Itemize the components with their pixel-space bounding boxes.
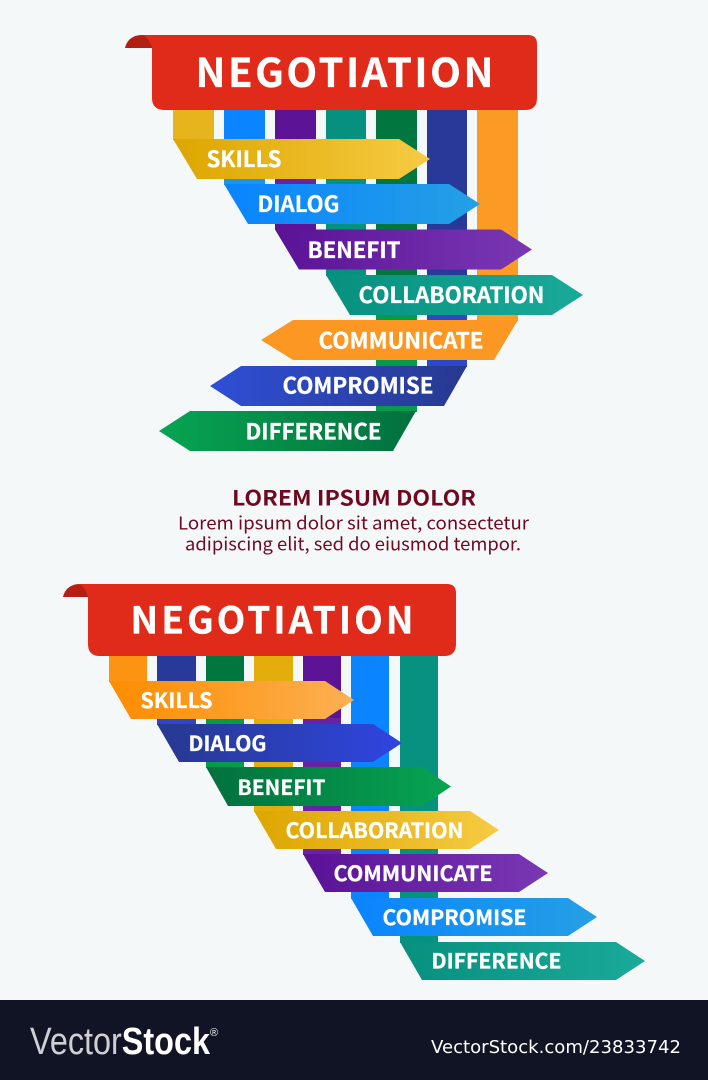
arrow: skills (173, 139, 430, 179)
footer image id: VectorStock.com/23833742 (431, 1037, 681, 1058)
footer logo: VectorStock (30, 1021, 211, 1063)
arrow: dialog: DIALOG (188, 728, 266, 758)
body line 2: adipiscing elit, sed do eiusmod tempor. (185, 530, 521, 556)
arrow: difference (400, 942, 645, 980)
arrow: communicate: COMMUNICATE (318, 324, 484, 356)
arrow: benefit (275, 230, 532, 270)
arrow: compromise: COMPROMISE (382, 902, 526, 932)
panel: top negotiation diagram (125, 35, 583, 451)
footer bar (0, 1000, 708, 1080)
arrow: compromise: COMPROMISE (282, 368, 434, 400)
arrow: difference: DIFFERENCE (246, 414, 382, 446)
arrow: collaboration: COLLABORATION (286, 815, 464, 845)
registered mark: ® (210, 1027, 218, 1039)
subheading: LOREM IPSUM DOLOR (232, 482, 476, 512)
bottom banner (63, 584, 456, 656)
arrow: compromise (351, 898, 597, 936)
bottom banner: NEGOTIATION (130, 590, 414, 644)
arrow: communicate (303, 854, 548, 892)
arrow: collaboration: COLLABORATION (358, 278, 544, 310)
arrow: compromise (210, 366, 467, 406)
arrow: skills: SKILLS (140, 685, 212, 715)
arrow: dialog: DIALOG (258, 187, 340, 219)
top banner: NEGOTIATION (196, 41, 494, 99)
arrow: benefit (206, 767, 451, 806)
top banner (125, 35, 537, 110)
arrow: collaboration (326, 275, 583, 315)
arrow: benefit: BENEFIT (238, 772, 326, 802)
arrow: dialog (224, 184, 480, 224)
arrow: difference: DIFFERENCE (432, 946, 562, 976)
arrow: dialog (157, 724, 402, 762)
arrow: communicate (261, 320, 518, 360)
top ribbon columns (173, 110, 518, 412)
arrow: benefit: BENEFIT (308, 233, 401, 265)
panel: bottom negotiation diagram (63, 584, 645, 980)
arrow: communicate: COMMUNICATE (334, 858, 492, 888)
arrow: skills (109, 681, 354, 719)
arrow: skills: SKILLS (206, 142, 282, 174)
text block: lorem ipsum (178, 482, 530, 556)
arrow: collaboration (254, 811, 499, 849)
body line 1: Lorem ipsum dolor sit amet, consectetur (178, 510, 530, 536)
arrow: difference (159, 411, 416, 451)
bottom ribbon columns (109, 656, 438, 943)
